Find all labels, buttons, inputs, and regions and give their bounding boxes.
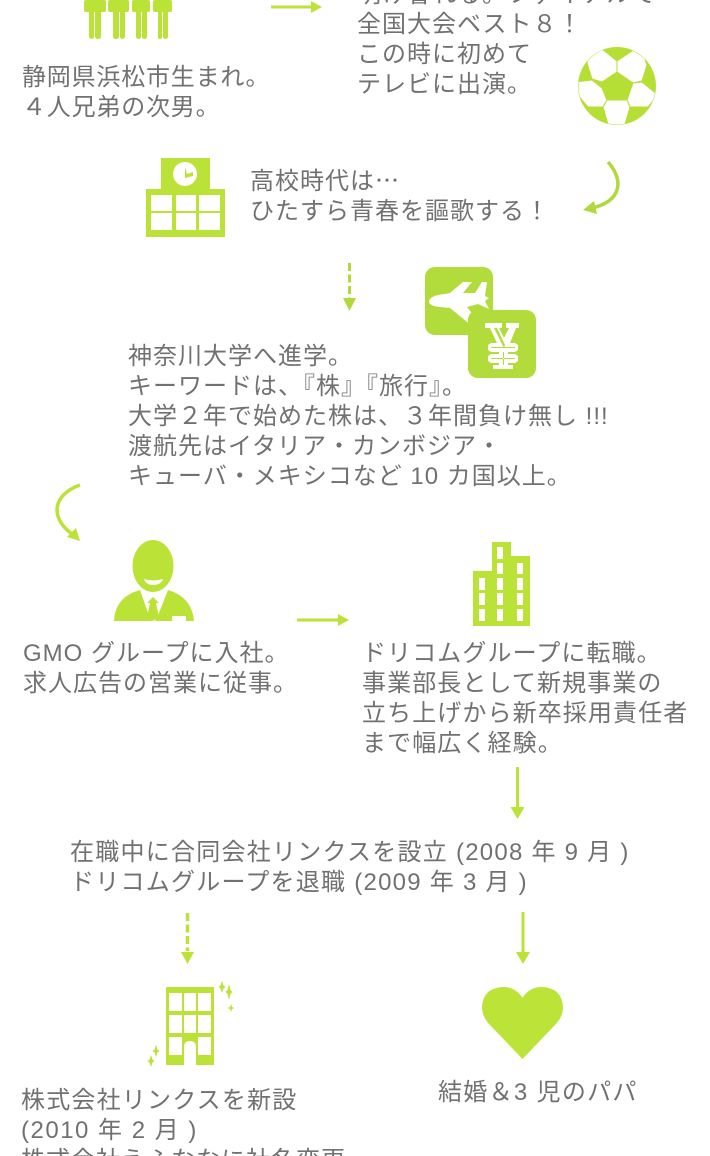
arrow: curved to GMO [57,485,80,541]
text: university: キューバ・メキシコなど 10 カ国以上。 [128,463,572,490]
text: Drecom group: まで幅広く経験。 [362,730,563,757]
arrow: down to founding [510,767,524,819]
text: Drecom group: 立ち上げから新卒採用責任者 [362,700,688,727]
text: founding LINX: 在職中に合同会社リンクスを設立 (2008 年 9 月 ) [70,839,630,866]
text: Drecom group: 事業部長として新規事業の [362,670,662,697]
text: soccer years: テレビに出演。 [357,71,532,98]
text: university [128,343,609,490]
icon: heart [482,987,563,1059]
text: university: 大学２年で始めた株は、３年間負け無し !!! [128,403,609,430]
text: soccer years: 全国大会ベスト８！ [357,11,582,38]
arrow: dashed down to university [343,263,356,311]
icon: yen stock tile [468,310,536,378]
text: birthplace: ４人兄弟の次男。 [22,94,220,121]
text: birthplace [22,64,270,121]
arrow: curved to school [583,162,618,214]
text: founding LINX: ドリコムグループを退職 (2009 年 3 月 ) [70,869,528,896]
icon: school [146,158,225,237]
text: university: 神奈川大学へ進学。 [128,343,353,370]
text: high school: 高校時代は… [250,161,400,196]
text: founding LINX [70,839,630,896]
text: soccer years: この時に初めて [357,41,532,68]
text: university: 渡航先はイタリア・カンボジア・ [128,433,502,460]
text: university: キーワードは、『株』『旅行』。 [128,373,467,400]
text: high school: ひたすら青春を謳歌する！ [250,198,550,225]
text: Drecom group [362,640,688,757]
icon: four brothers [84,0,172,39]
icons and arrows layer [55,0,656,1067]
text: Drecom group: ドリコムグループに転職。 [362,640,662,667]
icon: airplane tile [425,267,493,335]
arrow: right top [271,1,322,13]
arrow: right to Drecom [297,614,349,626]
text: new company: (2010 年 2 月 ) [21,1117,198,1144]
text: GMO group: GMO グループに入社。 [23,640,290,667]
arrow: down to marriage [516,912,530,964]
icon: soccer ball [578,47,656,125]
text: birthplace: 静岡県浜松市生まれ。 [22,64,270,91]
text: new company: 株式会社リンクスを新設 [21,1087,297,1114]
text: GMO group [23,640,298,697]
text: GMO group: 求人広告の営業に従事。 [23,670,298,697]
text: marriage: 結婚＆3 児のパパ [438,1079,638,1106]
text: soccer years [357,0,657,98]
text: high school [250,161,550,225]
text: new company [21,1087,346,1156]
arrow: dashed down to new company [181,913,194,964]
icon: businessman [114,540,194,621]
icon: office building [473,542,530,626]
icon: new office with sparkles [148,981,234,1067]
